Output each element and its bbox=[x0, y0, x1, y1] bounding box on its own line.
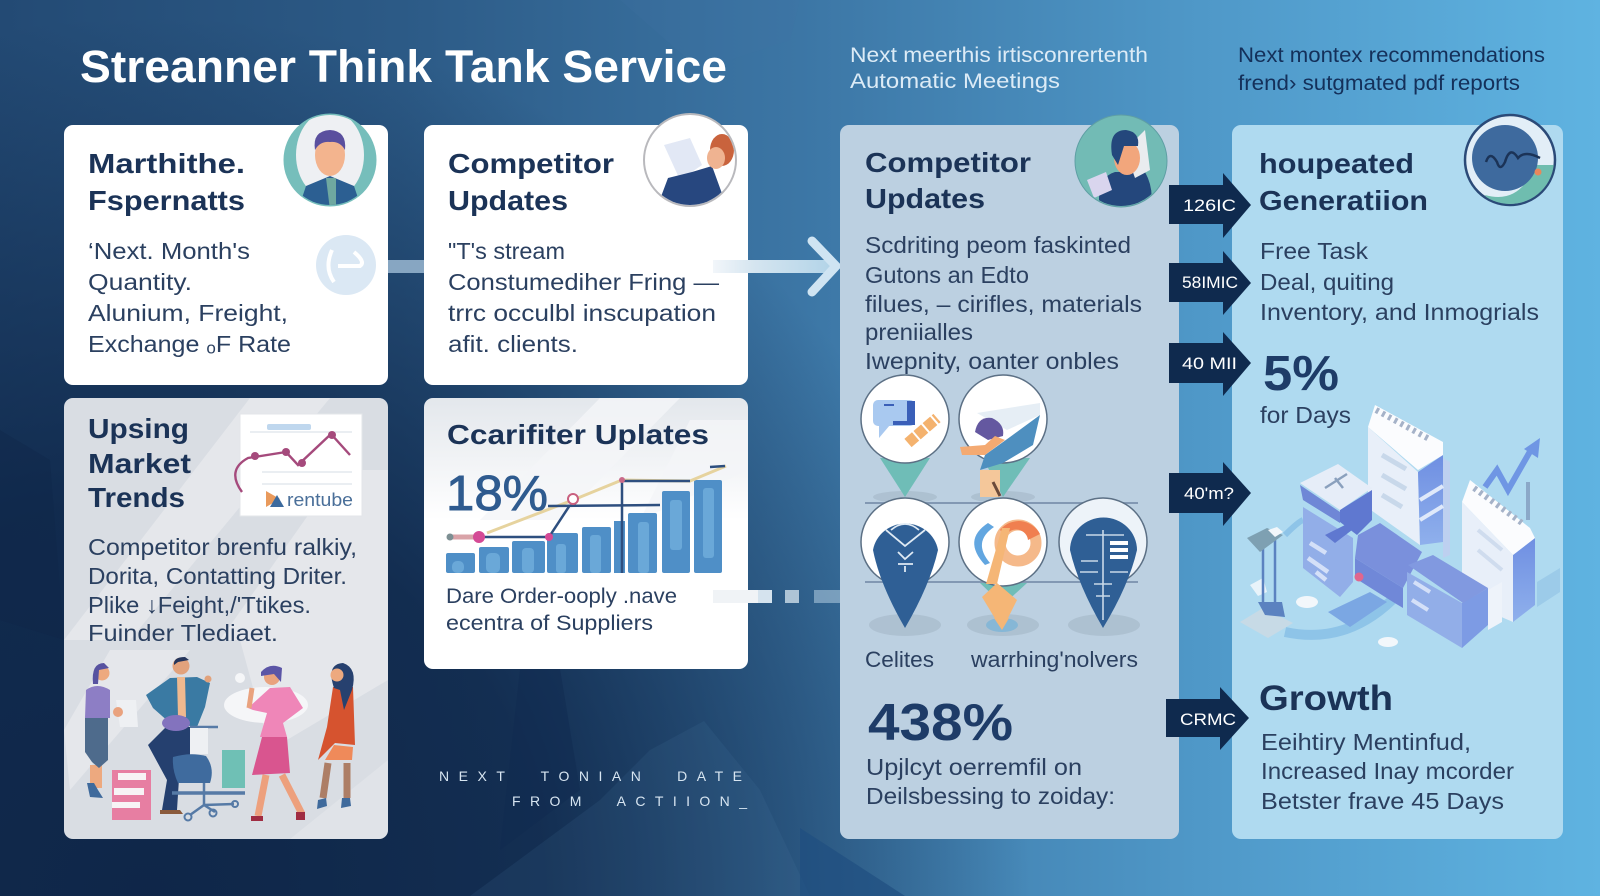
text block: preniialles bbox=[865, 319, 973, 345]
text block: ‘Next. Month's bbox=[88, 238, 250, 264]
heading: Market bbox=[88, 448, 191, 479]
heading bbox=[865, 147, 1031, 214]
caption: next date: NEXT TONIAN DATE bbox=[439, 768, 742, 784]
text block: Constumediher Fring — bbox=[448, 269, 719, 295]
heading bbox=[448, 148, 614, 216]
panel: competitor updates column bbox=[840, 115, 1179, 839]
column header: recommendations bbox=[1238, 44, 1545, 95]
front block bbox=[1407, 555, 1502, 648]
heading: Marthithe. bbox=[88, 148, 245, 179]
arrow: CRMC bbox=[1166, 687, 1249, 750]
icon: faint circular emblem bbox=[316, 235, 376, 295]
text block bbox=[88, 238, 291, 357]
connector: supplier card to column three bbox=[713, 590, 840, 603]
connector: card 1 to card 2 bbox=[388, 260, 424, 273]
column header: automatic meetings: Automatic Meetings bbox=[850, 70, 1060, 93]
arrow: 58IMIC: 58IMIC bbox=[1182, 273, 1238, 292]
heading: Updates bbox=[865, 183, 985, 214]
text block: Competitor brenfu ralkiy, bbox=[88, 534, 357, 560]
panel: repeated generation column bbox=[1232, 115, 1563, 839]
stack of books bbox=[112, 770, 151, 820]
arrow: 40 MII bbox=[1169, 332, 1251, 396]
icon: chevron pin bbox=[861, 498, 949, 628]
phone bbox=[1328, 592, 1387, 627]
shadows under pins bbox=[869, 491, 1140, 636]
heading: Generatiion bbox=[1259, 185, 1428, 216]
illustration: team of people bbox=[85, 657, 355, 821]
arrow: CRMC: CRMC bbox=[1180, 710, 1236, 729]
heading bbox=[88, 148, 245, 216]
icon: orange chart pin bbox=[959, 498, 1047, 632]
text block: Alunium, Freight, bbox=[88, 300, 288, 326]
text block bbox=[1261, 729, 1514, 814]
icon: chat pin bbox=[861, 375, 949, 497]
arrow: competitor card to column three bbox=[713, 241, 836, 292]
person: blue jacket bbox=[146, 657, 212, 814]
text block bbox=[865, 232, 1142, 374]
tall tower bbox=[1368, 405, 1450, 558]
heading: Ccarifiter Uplates bbox=[447, 419, 709, 450]
teal box bbox=[222, 750, 245, 788]
column header: recommendations: frend› sutgmated pdf reports bbox=[1238, 72, 1520, 95]
stat: 438%: 438% bbox=[868, 694, 1013, 752]
text block: Deal, quiting bbox=[1260, 269, 1394, 295]
labels under pins: Celites bbox=[865, 647, 934, 672]
panel: market forecasts bbox=[64, 111, 388, 385]
text block: Increased Inay mcorder bbox=[1261, 758, 1514, 784]
text block bbox=[866, 754, 1115, 809]
middle block bbox=[1354, 523, 1422, 608]
text block: filues, – cirifles, materials bbox=[865, 291, 1142, 317]
heading: Competitor bbox=[448, 148, 614, 179]
text block: Inventory, and Inmogrials bbox=[1260, 299, 1539, 325]
column header: recommendations: Next montex recommendations bbox=[1238, 44, 1545, 67]
arrow: 58IMIC bbox=[1169, 251, 1251, 315]
icon: reader avatar bbox=[644, 114, 736, 210]
person: pink dress bbox=[248, 666, 305, 821]
icon: list pin bbox=[1059, 498, 1147, 628]
person: purple blouse bbox=[85, 663, 138, 798]
column header: automatic meetings bbox=[850, 44, 1148, 93]
stat: 18%: 18% bbox=[446, 467, 548, 521]
labels under pins: warrhing'nolvers bbox=[970, 647, 1138, 672]
heading: Competitor bbox=[865, 147, 1031, 178]
panel: upsing market trends bbox=[64, 398, 388, 839]
text block bbox=[88, 534, 357, 646]
text block: Betster frave 45 Days bbox=[1261, 788, 1504, 814]
text block: afit. clients. bbox=[448, 331, 578, 357]
column header: automatic meetings: Next meerthis irtisconrertenth bbox=[850, 44, 1148, 67]
bar chart bbox=[446, 480, 722, 573]
line chart thumbnail bbox=[235, 414, 362, 516]
person: red coat bbox=[317, 663, 355, 809]
trend arrow bbox=[1485, 438, 1540, 490]
arrow: 40'm?: 40'm? bbox=[1184, 484, 1234, 503]
arrow: 40'm? bbox=[1169, 462, 1251, 526]
text block bbox=[1260, 238, 1539, 325]
text block: "T's stream bbox=[448, 238, 565, 264]
panel: competitor updates bbox=[424, 114, 748, 385]
lamp and keyboard bbox=[1240, 527, 1293, 638]
heading: Fspernatts bbox=[88, 185, 245, 216]
divider lines bbox=[865, 503, 1138, 582]
icon: avatar bbox=[1075, 115, 1167, 210]
icon: businessman avatar bbox=[284, 111, 376, 210]
title: Streanner Think Tank Service bbox=[80, 41, 727, 92]
labels under pins bbox=[865, 647, 1138, 672]
line chart thumbnail: rentube bbox=[287, 490, 353, 510]
arrow: 40 MII: 40 MII bbox=[1182, 354, 1237, 373]
caption: next date bbox=[439, 768, 747, 809]
text block: trrc occulbl inscupation bbox=[448, 300, 716, 326]
text block: Scdriting peom faskinted bbox=[865, 232, 1131, 258]
text block: Eeihtiry Mentinfud, bbox=[1261, 729, 1471, 755]
caption: next date: FROM ACTIION_ bbox=[512, 793, 747, 809]
heading bbox=[88, 413, 191, 513]
text block: Iwepnity, oanter onbles bbox=[865, 348, 1119, 374]
text block: ecentra of Suppliers bbox=[446, 612, 653, 635]
arrow: 126IC bbox=[1169, 173, 1251, 238]
text block bbox=[446, 585, 677, 635]
icon: generator avatar bbox=[1465, 115, 1555, 205]
text block: Upjlcyt oerremfil on bbox=[866, 754, 1082, 780]
text block: Exchange ₒF Rate bbox=[88, 331, 291, 357]
text block: Gutons an Edto bbox=[865, 262, 1029, 288]
illustration: isometric data centre bbox=[1240, 405, 1560, 648]
heading: Upsing bbox=[88, 413, 189, 444]
heading: growth: Growth bbox=[1259, 679, 1393, 718]
panel: supplier chart card bbox=[424, 398, 748, 669]
arrow: 126IC: 126IC bbox=[1183, 196, 1236, 215]
stat: 5%: 5% bbox=[1263, 347, 1339, 401]
trend lines bbox=[446, 466, 726, 573]
heading bbox=[1259, 148, 1428, 216]
right tower bbox=[1462, 480, 1535, 622]
icon: person pin bbox=[959, 375, 1047, 497]
caption: for Days bbox=[1260, 402, 1351, 428]
text block bbox=[448, 238, 719, 357]
heading: Trends bbox=[88, 482, 185, 513]
text block: Quantity. bbox=[88, 269, 192, 295]
text block: Free Task bbox=[1260, 238, 1369, 264]
text block: Dorita, Contatting Driter. bbox=[88, 563, 347, 589]
left block bbox=[1300, 464, 1372, 597]
text block: Plike ↓Feight,/'Ttikes. bbox=[88, 592, 311, 618]
office chair bbox=[172, 727, 245, 820]
text block: Dare Order-ooply .nave bbox=[446, 585, 677, 608]
text block: Deilsbessing to zoiday: bbox=[866, 783, 1115, 809]
floor shadows bbox=[1537, 568, 1560, 607]
text block: Fuinder Tlediaet. bbox=[88, 620, 278, 646]
heading: houpeated bbox=[1259, 148, 1414, 179]
heading: Updates bbox=[448, 185, 568, 216]
